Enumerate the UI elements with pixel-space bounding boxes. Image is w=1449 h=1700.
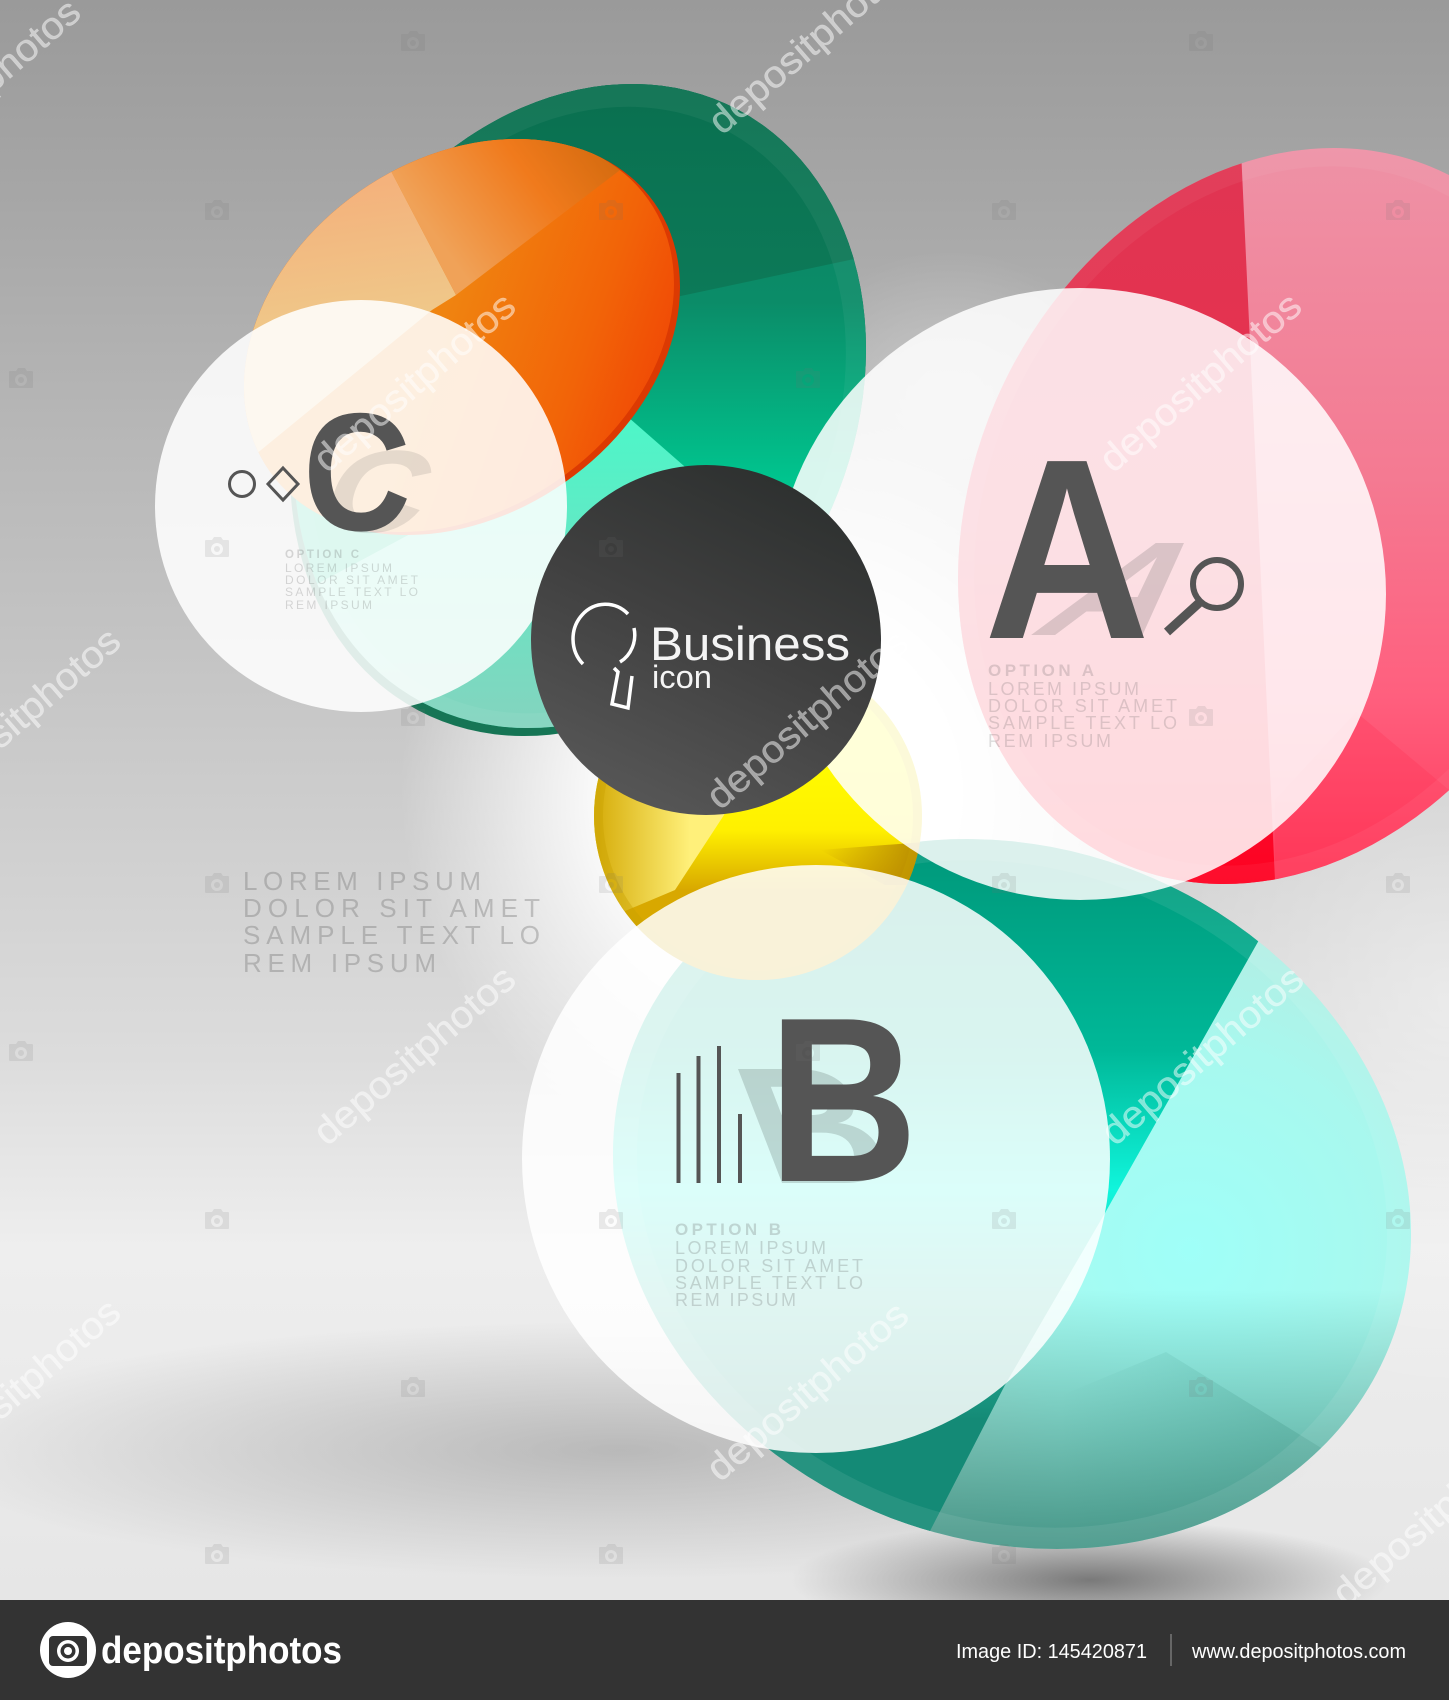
text block: left lorem ipsum <box>243 866 540 978</box>
option A text: REM IPSUM <box>988 731 1111 751</box>
circle: dark central <box>531 465 881 815</box>
footer image id: Image ID: 145420871 <box>956 1641 1147 1663</box>
text block: left lorem ipsum: SAMPLE TEXT LO <box>243 920 540 950</box>
option B text: DOLOR SIT AMET <box>675 1256 863 1276</box>
option C text: SAMPLE TEXT LO <box>285 585 418 599</box>
option C: letter, icons and text <box>230 378 452 612</box>
option C text: REM IPSUM <box>285 598 372 612</box>
icon: magnifying glass <box>1167 560 1241 632</box>
watermark: diagonal depositphotos text: depositphotos <box>1091 285 1310 481</box>
option A text <box>988 661 1177 751</box>
text block: left lorem ipsum: LOREM IPSUM <box>243 866 481 896</box>
option B text: SAMPLE TEXT LO <box>675 1273 863 1293</box>
icon: bar chart lines <box>676 1046 742 1183</box>
option A text: SAMPLE TEXT LO <box>988 713 1177 733</box>
option B text <box>675 1220 863 1310</box>
option B text: OPTION B <box>675 1220 781 1239</box>
letter A: A <box>984 406 1150 693</box>
option A text: OPTION A <box>988 661 1094 680</box>
option C text: DOLOR SIT AMET <box>285 573 419 587</box>
letter C shadow: C <box>307 426 452 557</box>
icon: footer camera logo <box>40 1622 96 1678</box>
circle: orange circle <box>244 139 680 535</box>
circle: teal circle <box>613 839 1411 1549</box>
option A text: LOREM IPSUM <box>988 679 1139 699</box>
text block: left lorem ipsum: DOLOR SIT AMET <box>243 893 540 923</box>
letter A shadow: A <box>1001 514 1256 664</box>
circle: green back circle <box>291 84 866 736</box>
letter B: B <box>768 968 918 1231</box>
icon: circle outline <box>230 472 254 496</box>
heading: Business: Business <box>650 617 850 670</box>
watermark: diagonal depositphotos text: depositphotos <box>305 958 524 1154</box>
icon: light bulb <box>573 604 635 708</box>
option B text: REM IPSUM <box>675 1290 796 1310</box>
watermark: diagonal depositphotos text: depositphotos <box>698 622 917 818</box>
circle: white option A <box>774 288 1386 900</box>
footer website: www.depositphotos.com <box>1191 1641 1406 1663</box>
text block: left lorem ipsum: REM IPSUM <box>243 948 436 978</box>
circle: yellow circle <box>594 698 922 980</box>
option B text: LOREM IPSUM <box>675 1238 826 1258</box>
watermark: diagonal depositphotos text: depositphotos <box>1093 958 1312 1154</box>
footer bar <box>0 1600 1449 1700</box>
option C text <box>285 549 419 612</box>
option C text: LOREM IPSUM <box>285 561 392 575</box>
subheading: icon: icon <box>652 659 712 695</box>
letter B shadow: B <box>712 1033 914 1218</box>
option C text: OPTION C <box>285 549 359 561</box>
letter C: C <box>303 378 411 566</box>
footer logo text: depositphotos <box>101 1630 342 1672</box>
option A text: DOLOR SIT AMET <box>988 696 1177 716</box>
circle: white option B <box>522 865 1110 1453</box>
circle: white option C <box>155 300 567 712</box>
option A: letter, icon and text <box>984 406 1256 751</box>
icon: diamond outline <box>268 468 298 500</box>
watermark: diagonal depositphotos text: depositphotos <box>305 285 524 481</box>
watermark: diagonal depositphotos text: depositphotos <box>698 1294 917 1490</box>
central label: Business icon <box>573 604 850 708</box>
option B: letter, icon and text <box>675 968 918 1310</box>
circle: pink and red circle <box>958 148 1449 884</box>
